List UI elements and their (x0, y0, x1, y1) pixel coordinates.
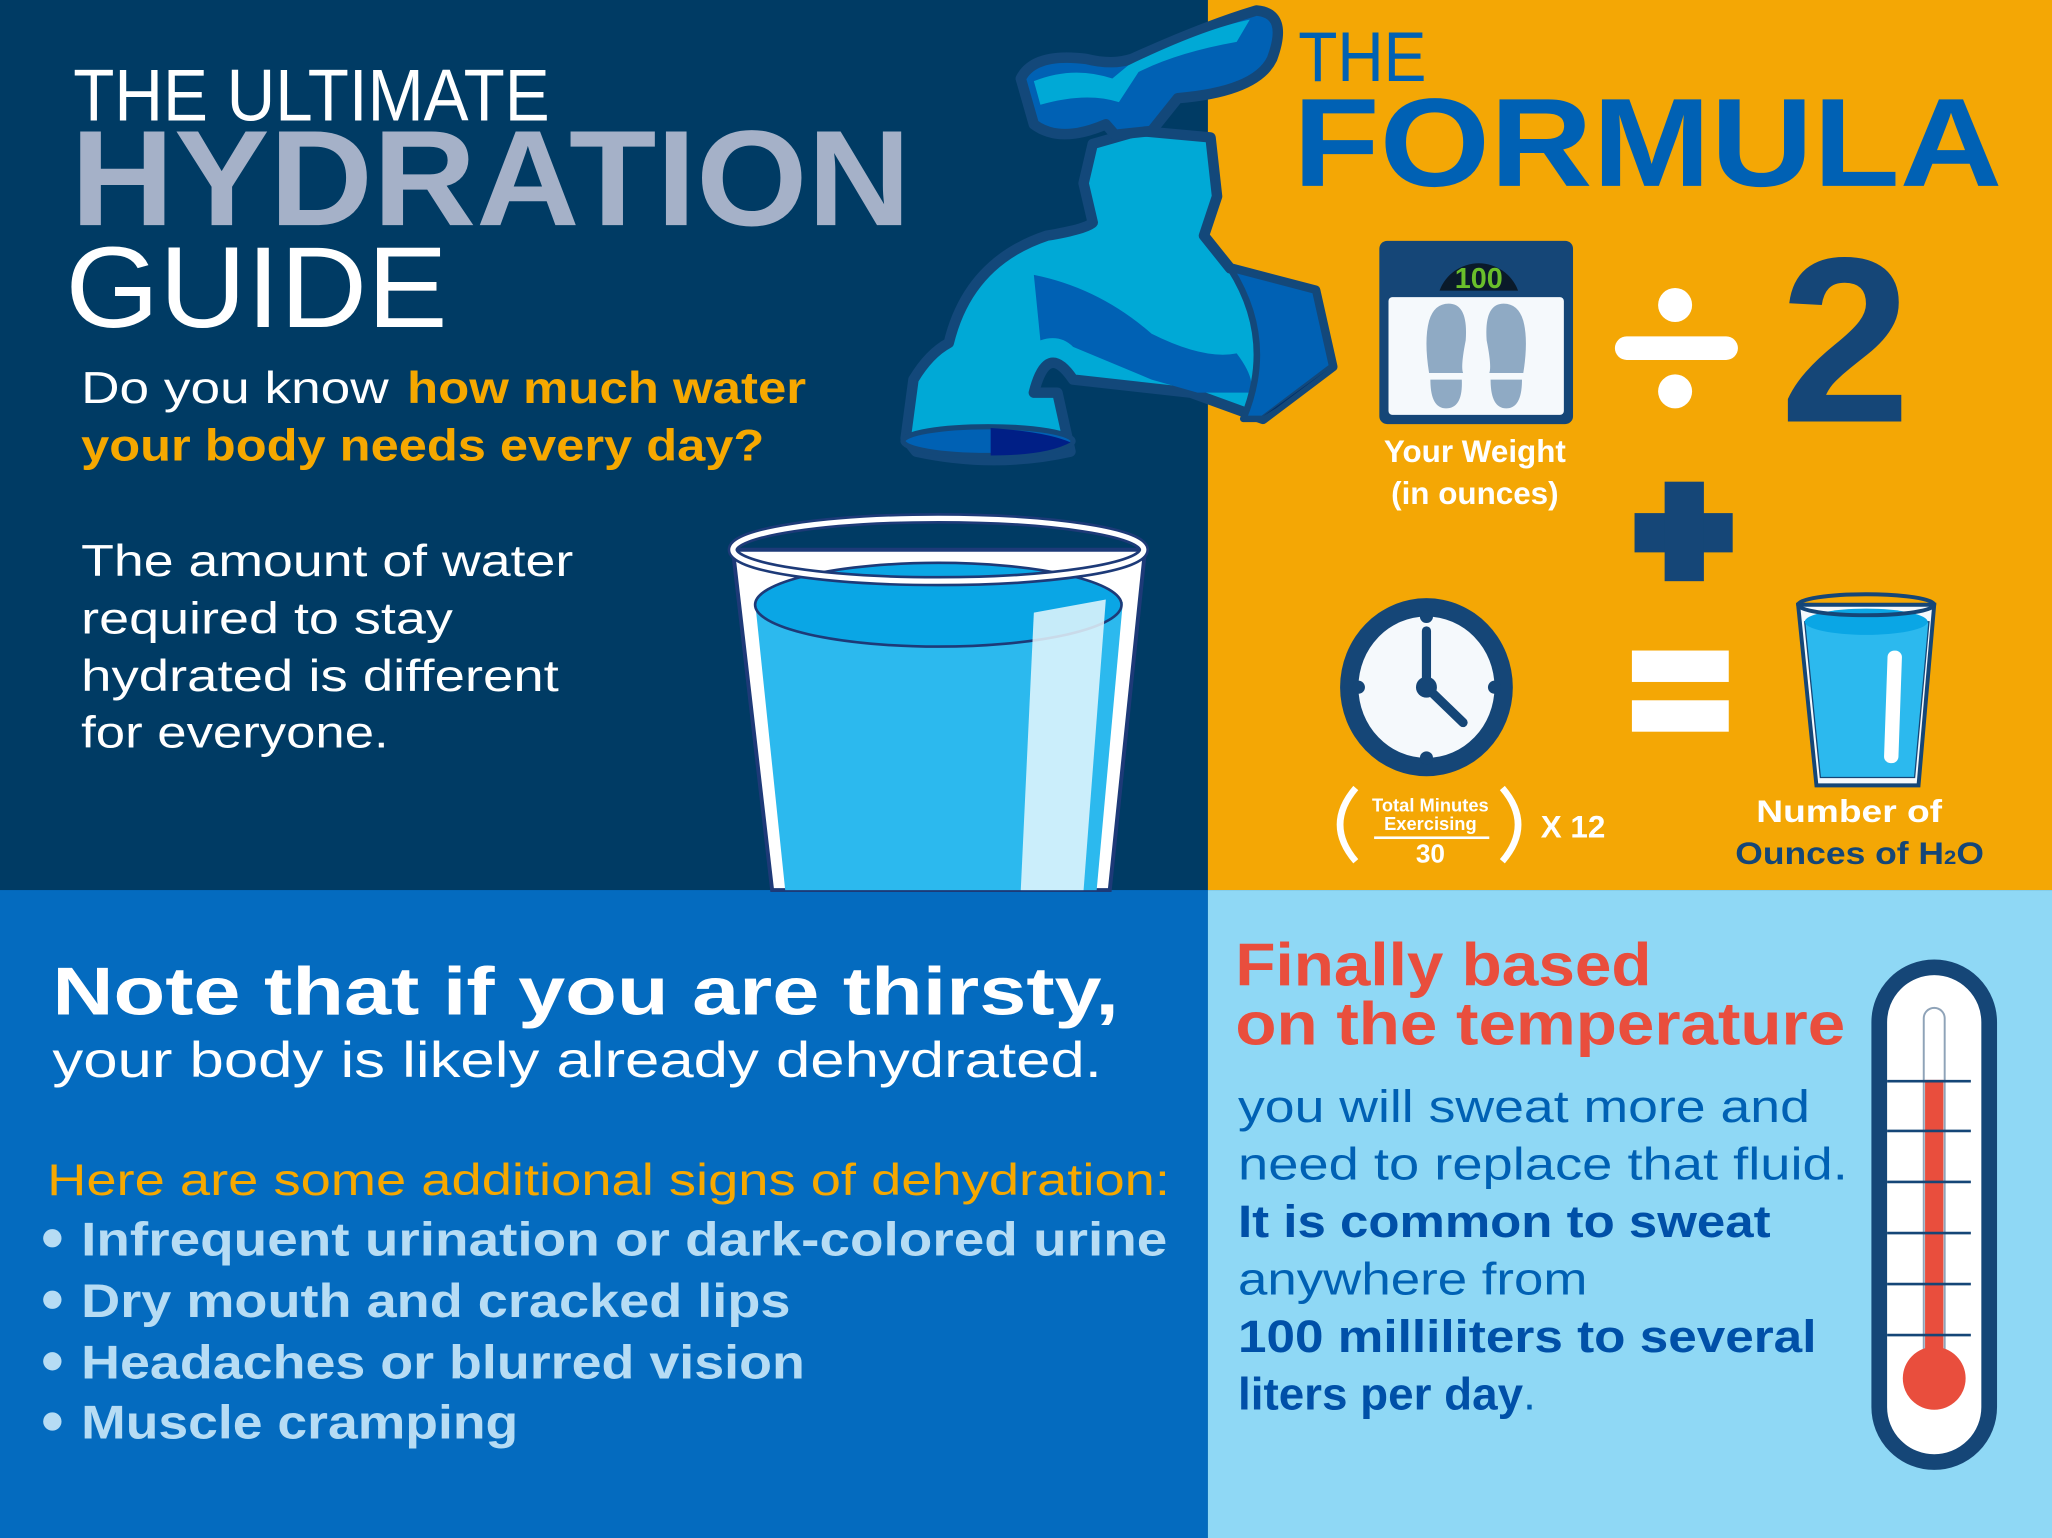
list: dehydration signs: Dry mouth and cracked lips (81, 1274, 790, 1327)
heading: temperature: Finally based (1235, 932, 1652, 999)
icon: weight scale (1379, 241, 1573, 424)
text: sweat info: you will sweat more and (1238, 1081, 1810, 1132)
title: GUIDE (65, 224, 448, 352)
icon: faucet (903, 10, 1332, 460)
exercise formula: Total Minutes (1372, 795, 1489, 816)
icon: clock (1340, 598, 1513, 776)
text: sweat info: need to replace that fluid. (1238, 1138, 1848, 1189)
intro paragraph: for everyone. (81, 708, 389, 757)
heading: the formula: FORMULA (1293, 72, 2002, 213)
exercise formula: Exercising (1384, 813, 1477, 834)
intro paragraph: required to stay (81, 595, 454, 644)
number 2: 2 (1780, 208, 1911, 471)
heading: the formula (1293, 17, 2002, 213)
label: your weight (1384, 434, 1566, 511)
panel: dehydration background (0, 890, 1208, 1538)
list: dehydration signs (43, 1212, 1167, 1449)
icon: weight scale: 100 (1455, 263, 1503, 295)
question text: Do you know (81, 364, 390, 413)
panel: intro background (0, 0, 1208, 890)
intro paragraph: hydrated is different (81, 652, 560, 701)
heading: thirsty note: your body is likely already dehydrated. (52, 1032, 1102, 1088)
icon: large glass of water (733, 518, 1145, 890)
exercise formula (1340, 788, 1605, 869)
list: dehydration signs: Infrequent urination or dark-colored urine (81, 1212, 1167, 1265)
question text (81, 364, 806, 471)
label: your weight: (in ounces) (1391, 476, 1559, 511)
text: sweat info (1238, 1081, 1848, 1420)
subheading: signs of dehydration: Here are some additional signs of dehydration: (47, 1156, 1170, 1205)
heading: temperature: on the temperature (1235, 991, 1845, 1058)
heading: thirsty note (52, 953, 1119, 1088)
icon: equals sign (1632, 651, 1729, 732)
intro paragraph: The amount of water (81, 537, 573, 586)
list: dehydration signs: Muscle cramping (81, 1396, 518, 1449)
exercise formula: X 12 (1541, 810, 1605, 845)
label: your weight: Your Weight (1384, 434, 1566, 469)
exercise formula: 30 (1416, 839, 1445, 869)
list: dehydration signs: Headaches or blurred vision (81, 1335, 805, 1388)
label: number of ounces (1735, 794, 1984, 871)
icon: small glass (1798, 594, 1934, 785)
title: HYDRATION (71, 102, 911, 254)
heading: thirsty note: Note that if you are thirsty, (52, 953, 1119, 1029)
heading: the formula: THE (1298, 17, 1426, 96)
title: THE ULTIMATE (73, 54, 550, 136)
text: sweat info: 100 milliliters to several (1238, 1311, 1816, 1362)
label: number of ounces: Ounces of H 2O (1735, 836, 1984, 871)
question text: your body needs every day? (81, 422, 764, 471)
intro paragraph (81, 537, 573, 757)
text: sweat info: anywhere from (1238, 1254, 1587, 1305)
text: sweat info: It is common to sweat (1238, 1196, 1771, 1247)
panel: temperature background (1208, 890, 2052, 1538)
icon: plus sign (1635, 482, 1733, 581)
icon: thermometer (1879, 967, 1989, 1462)
icon: divide sign (1615, 288, 1738, 408)
text: sweat info: liters per day. (1238, 1369, 1536, 1420)
label: number of ounces: Number of (1756, 794, 1943, 829)
panel: formula background (1208, 0, 2052, 890)
heading: temperature (1235, 932, 1845, 1058)
title (65, 54, 911, 352)
question text: how much water (407, 364, 806, 413)
